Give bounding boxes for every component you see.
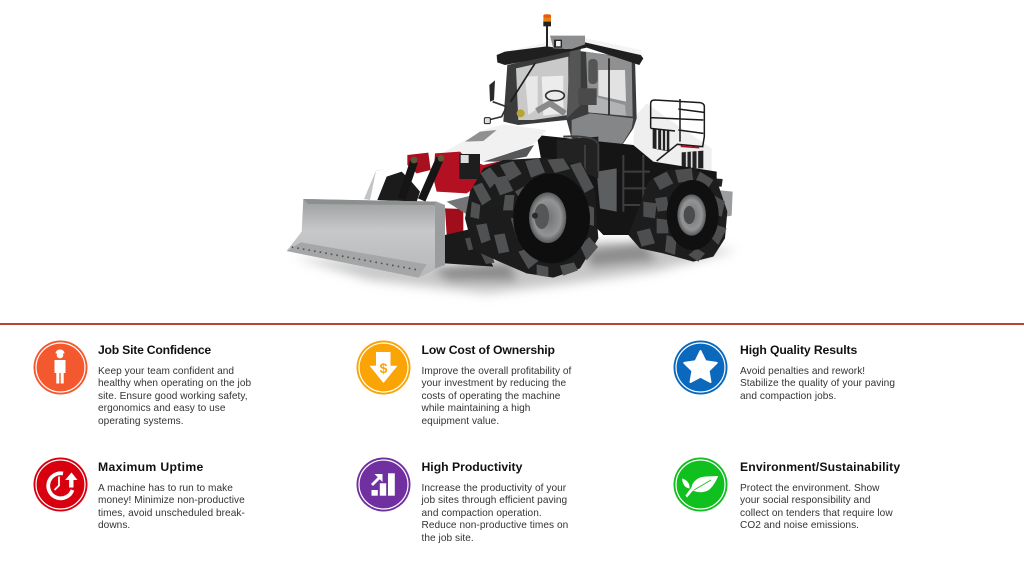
icon: worker — [34, 340, 88, 394]
text: Environment/Sustainability: Protect the environment. Show — [740, 482, 879, 494]
icon: rising bars with arrow — [356, 458, 410, 512]
text: High Productivity: High Productivity — [422, 460, 522, 474]
illustration: soil compactor machine with dozer blade — [286, 14, 733, 298]
text: High Productivity — [421, 460, 568, 544]
icon: down arrow with dollar — [356, 340, 410, 394]
text: Environment/Sustainability: CO2 and noise emissions. — [740, 520, 859, 531]
text: High Quality Results: Stabilize the quality of your paving — [740, 378, 895, 389]
text: Job Site Confidence: healthy when operating on the job — [98, 378, 251, 389]
text: Low Cost of Ownership: while maintaining a high — [422, 403, 530, 414]
cab — [484, 14, 643, 148]
text: Job Site Confidence — [98, 343, 251, 426]
text: High Quality Results: and compaction jobs. — [740, 390, 836, 402]
text: Low Cost of Ownership — [422, 343, 572, 426]
icon: star — [674, 340, 728, 394]
red front frame and hydraulic cylinders — [364, 152, 507, 267]
text: Job Site Confidence: operating systems. — [98, 416, 184, 426]
text: High Quality Results: Avoid penalties and rework! — [740, 366, 865, 376]
text: High Productivity: job sites through efficient paving — [422, 495, 567, 506]
text: Maximum Uptime: downs. — [98, 520, 130, 531]
text: Job Site Confidence: site. Ensure good working safety, — [98, 390, 248, 402]
dozer blade — [287, 199, 445, 278]
rear wheel with pads — [628, 168, 727, 262]
text: Job Site Confidence: Job Site Confidence — [98, 343, 211, 357]
text: Maximum Uptime: times, avoid unscheduled break- — [98, 508, 245, 518]
text: Environment/Sustainability: your social responsibility and — [740, 495, 871, 506]
text: High Productivity: the job site. — [422, 532, 474, 544]
text: Maximum Uptime: A machine has to run to make — [98, 482, 233, 494]
hood — [445, 124, 547, 162]
text: Job Site Confidence: ergonomics and easy to use — [98, 403, 226, 414]
ground shadow — [293, 242, 737, 293]
beacon — [544, 26, 550, 47]
cab roof — [495, 36, 643, 65]
text: Low Cost of Ownership: your investment by reducing the — [422, 378, 566, 389]
icon: clock with up arrow — [34, 458, 88, 512]
text: High Productivity: Reduce non-productive times on — [422, 520, 568, 531]
text: Job Site Confidence: Keep your team confident and — [98, 366, 234, 376]
text: Environment/Sustainability: collect on tenders that require low — [740, 508, 893, 518]
divider line — [0, 323, 1024, 325]
icon: down arrow with dollar: $ — [379, 360, 387, 376]
text: Low Cost of Ownership: costs of operating the machine — [422, 390, 560, 402]
text: Low Cost of Ownership: equipment value. — [422, 416, 499, 426]
text: Maximum Uptime: money! Minimize non-productive — [98, 495, 245, 506]
text: Environment/Sustainability — [740, 460, 900, 531]
icon: leaves — [674, 458, 728, 512]
text: High Quality Results: High Quality Results — [740, 343, 857, 357]
text: High Quality Results — [740, 343, 895, 402]
text: Environment/Sustainability: Environment/Sustainability — [740, 460, 900, 474]
rear body and railing — [633, 99, 733, 218]
mid body frame and steps — [537, 135, 717, 235]
text: Maximum Uptime: Maximum Uptime — [98, 460, 204, 474]
text: Low Cost of Ownership: Improve the overall profitability of — [422, 366, 571, 376]
text: Maximum Uptime — [98, 460, 245, 531]
text: High Productivity: and compaction operation. — [422, 508, 542, 518]
front wheel with pads — [465, 158, 598, 278]
side mirror — [489, 80, 495, 102]
text: Low Cost of Ownership: Low Cost of Ownership — [422, 343, 555, 357]
cab windows — [516, 57, 568, 120]
text: High Productivity: Increase the productivity of your — [422, 482, 566, 494]
